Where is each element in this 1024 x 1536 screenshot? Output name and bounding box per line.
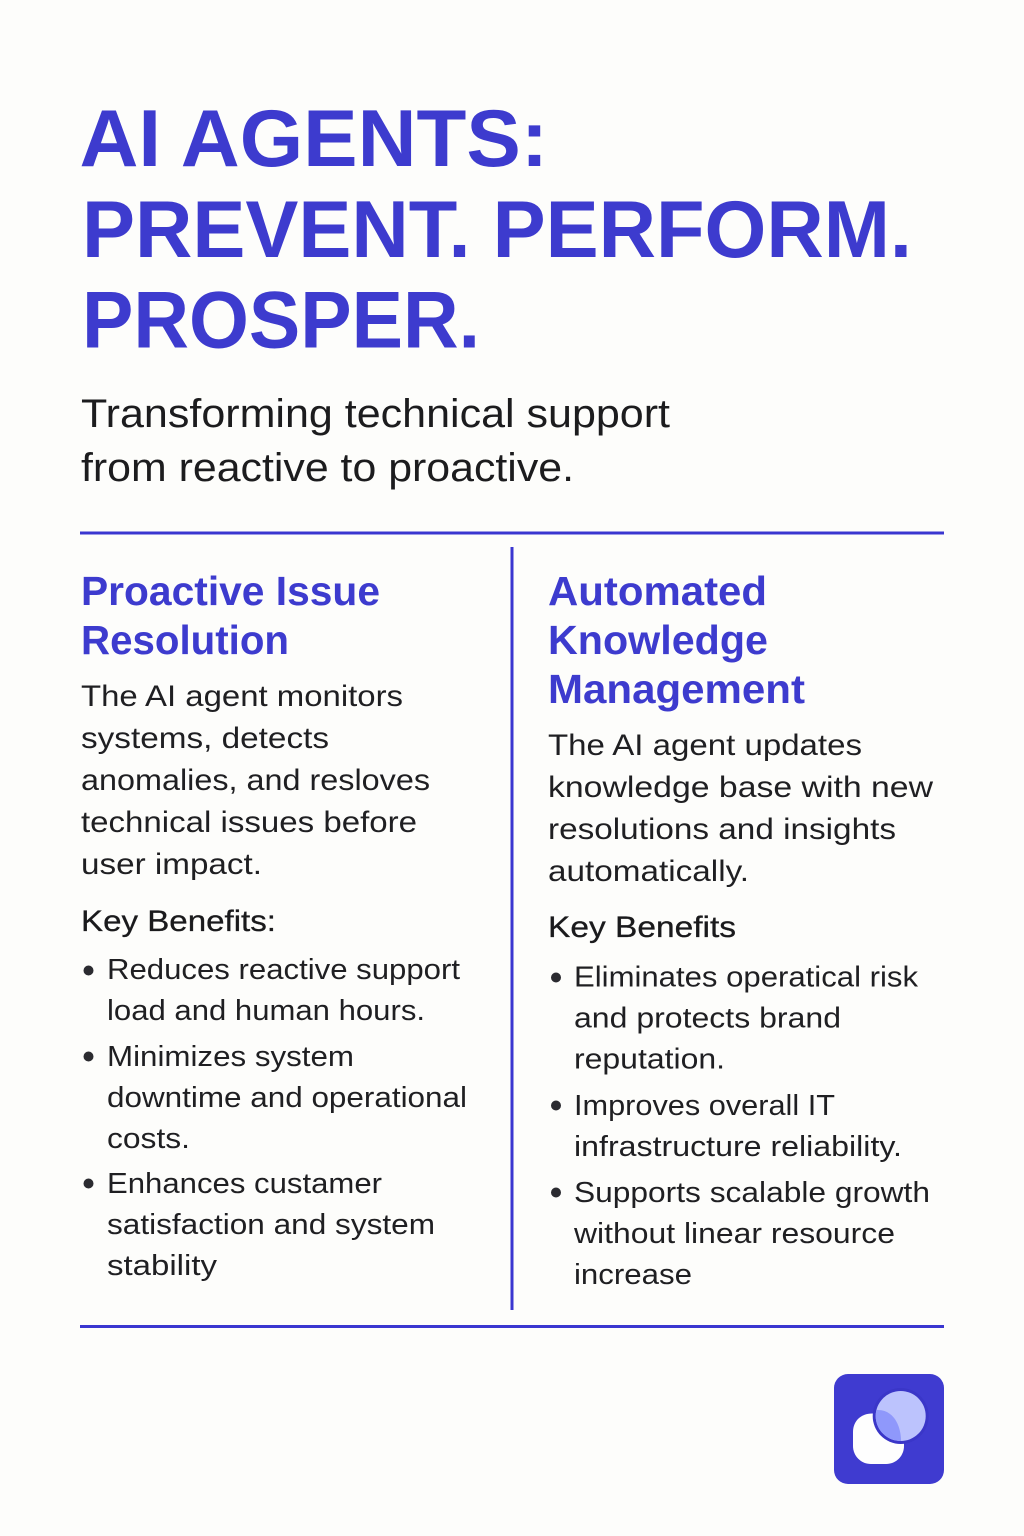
description: user impact. <box>81 848 262 881</box>
benefits list: Improves overall IT <box>574 1090 835 1122</box>
panel: proactive issue resolution <box>81 568 467 1282</box>
description: knowledge base with new <box>548 771 933 804</box>
benefits list: satisfaction and system <box>107 1209 435 1241</box>
subtitle <box>81 392 670 490</box>
benefits list: Minimizes system <box>107 1041 354 1073</box>
benefits list: Supports scalable growth <box>574 1177 930 1209</box>
benefits list: stability <box>107 1250 218 1282</box>
subheading: key benefits: Key Benefits <box>548 911 736 944</box>
heading: automated knowledge management: Automated <box>548 568 767 614</box>
description: The AI agent monitors <box>81 680 403 713</box>
subtitle: Transforming technical support <box>81 392 670 436</box>
heading: automated knowledge management <box>548 568 805 712</box>
description <box>81 680 430 881</box>
title <box>80 94 912 366</box>
benefits list: Reduces reactive support <box>107 954 460 986</box>
benefits list: Eliminates operatical risk <box>574 962 919 994</box>
description: anomalies, and resloves <box>81 764 430 797</box>
description: technical issues before <box>81 806 417 839</box>
benefits list: Enhances custamer <box>107 1168 382 1200</box>
description: The AI agent updates <box>548 729 862 762</box>
benefits list: and protects brand <box>574 1002 841 1034</box>
benefits list: reputation. <box>574 1044 725 1076</box>
description <box>548 729 933 888</box>
benefits list: load and human hours. <box>107 995 425 1027</box>
description: resolutions and insights <box>548 813 896 846</box>
benefits list: costs. <box>107 1123 190 1155</box>
icon: overlapping shapes logo <box>834 1374 944 1484</box>
title: PROSPER. <box>82 276 480 366</box>
heading: automated knowledge management: Management <box>548 666 805 712</box>
benefits list: downtime and operational <box>107 1082 467 1114</box>
subtitle: from reactive to proactive. <box>81 446 574 490</box>
heading: proactive issue resolution <box>81 568 380 663</box>
heading: proactive issue resolution: Resolution <box>81 617 289 663</box>
benefits list <box>551 962 930 1291</box>
heading: automated knowledge management: Knowledge <box>548 617 768 663</box>
title: AI AGENTS: <box>80 94 548 184</box>
title: PREVENT. PERFORM. <box>82 185 912 275</box>
subheading: key benefits: Key Benefits: <box>81 905 276 938</box>
benefits list: infrastructure reliability. <box>574 1131 902 1163</box>
benefits list: without linear resource <box>573 1218 895 1250</box>
panel: automated knowledge management <box>548 568 933 1291</box>
benefits list <box>84 954 467 1282</box>
description: automatically. <box>548 855 749 888</box>
description: systems, detects <box>81 722 329 755</box>
benefits list: increase <box>574 1259 692 1291</box>
heading: proactive issue resolution: Proactive Issue <box>81 568 380 614</box>
